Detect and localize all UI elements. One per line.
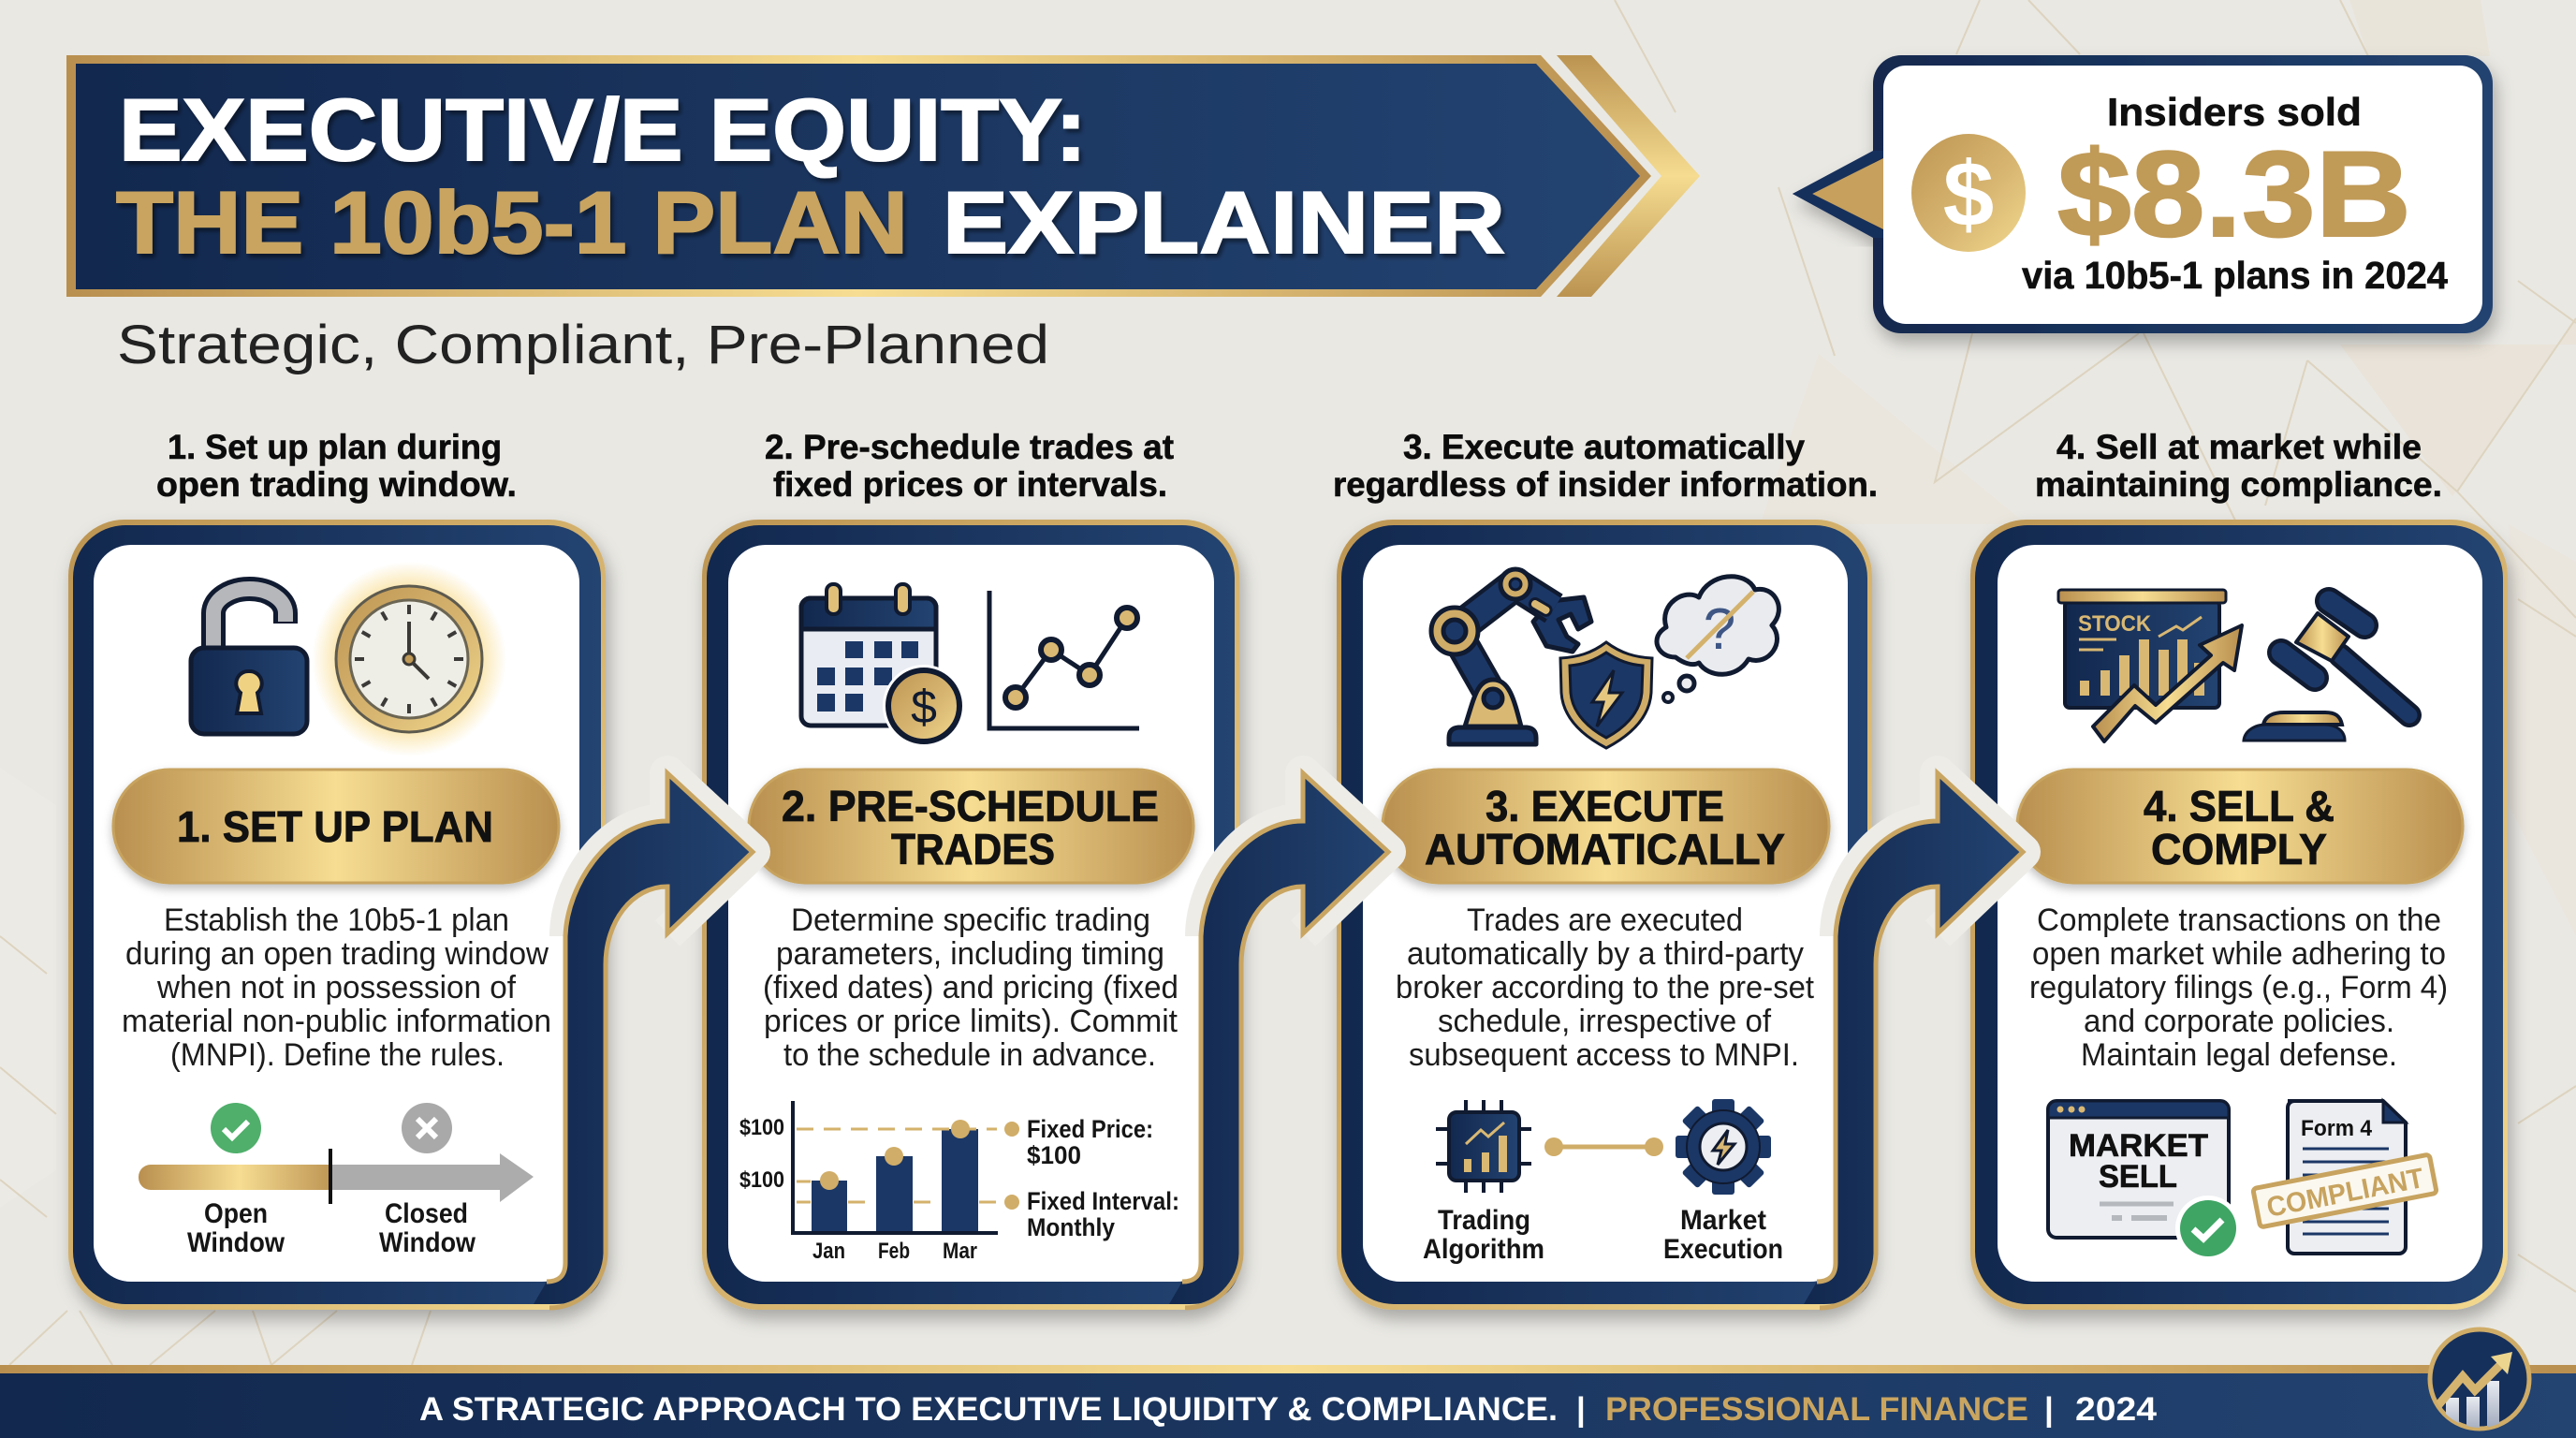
- body text 1: material non-public information: [122, 1004, 551, 1039]
- title banner: [66, 55, 1700, 297]
- label: market execution: [1663, 1205, 1783, 1265]
- icon: stock board: STOCK: [2078, 611, 2152, 637]
- icon: dollar coin: $: [1943, 142, 1994, 245]
- body text 3: broker according to the pre-set: [1396, 970, 1815, 1005]
- icon: robot arm: [1431, 569, 1591, 744]
- icon: logo badge: [2430, 1329, 2529, 1435]
- icon: line chart: [989, 591, 1139, 728]
- label: closed window: Closed: [385, 1198, 468, 1229]
- step caption 3: [1333, 428, 1878, 504]
- pill 2 title: [782, 782, 1159, 873]
- icon: calendar with coin: $: [911, 681, 937, 733]
- stamp: compliant: COMPLIANT: [2264, 1163, 2426, 1224]
- body text 2: to the schedule in advance.: [783, 1037, 1156, 1073]
- label: market execution: Market: [1680, 1205, 1766, 1236]
- body text 1: (MNPI). Define the rules.: [170, 1037, 505, 1073]
- panel 3 frame: [1337, 520, 1872, 1310]
- step caption 2: [765, 428, 1174, 504]
- pill 3 title: [1425, 782, 1785, 873]
- icon: stock board: [2058, 590, 2242, 741]
- body text 1: during an open trading window: [125, 936, 549, 972]
- icon: open padlock: [191, 589, 307, 734]
- pill 4 title: 4. SELL &: [2144, 782, 2334, 830]
- footer text gold: PROFESSIONAL FINANCE: [1605, 1391, 2028, 1428]
- body text 1: when not in possession of: [156, 970, 517, 1005]
- market sell window: SELL: [2099, 1159, 2177, 1195]
- label: closed window: [379, 1198, 476, 1258]
- connector line: [1544, 1137, 1663, 1156]
- body text 4: regulatory filings (e.g., Form 4): [2029, 970, 2448, 1005]
- chart y labels: $100: [739, 1167, 784, 1193]
- form 4 document with stamp: [2253, 1101, 2437, 1254]
- step caption 1: [156, 428, 517, 504]
- market sell window: [2048, 1101, 2241, 1261]
- label: market execution: Execution: [1663, 1234, 1783, 1265]
- callout text top: Insiders sold: [2107, 90, 2362, 134]
- icon: thought cloud: ?: [1704, 597, 1735, 662]
- chart y labels: [739, 1115, 784, 1193]
- icon: check badge: [2175, 1196, 2241, 1261]
- step caption 2: 2. Pre-schedule trades at: [765, 428, 1174, 466]
- chart y labels: $100: [739, 1115, 784, 1140]
- body text 2: (fixed dates) and pricing (fixed: [763, 970, 1178, 1005]
- icon: calendar with coin: [801, 584, 965, 747]
- body text 2: parameters, including timing: [776, 936, 1164, 972]
- icon: trading algorithm chip: [1436, 1100, 1531, 1193]
- pill 4 title: COMPLY: [2151, 825, 2327, 873]
- body text 4: [2029, 902, 2448, 1073]
- label: open window: Open: [204, 1198, 268, 1229]
- title line 2 gold: THE 10b5-1 PLAN: [116, 173, 908, 271]
- body text 3: Trades are executed: [1467, 902, 1743, 938]
- icon: green check: [211, 1103, 261, 1153]
- panel 1 frame: [68, 520, 606, 1310]
- chart month labels: Mar: [943, 1239, 977, 1264]
- pill 4 title: [2144, 782, 2334, 873]
- pill 3 title: 3. EXECUTE: [1486, 782, 1724, 830]
- chart legend: [1027, 1115, 1179, 1241]
- subtitle: Strategic, Compliant, Pre-Planned: [117, 315, 1049, 375]
- body text 1: Establish the 10b5-1 plan: [164, 902, 509, 938]
- chart legend: Monthly: [1027, 1213, 1115, 1241]
- step caption 4: 4. Sell at market while: [2056, 428, 2422, 466]
- footer text main: A STRATEGIC APPROACH TO EXECUTIVE LIQUIDITY & COMPLIANCE.: [419, 1391, 1558, 1428]
- chart legend: Fixed Interval:: [1027, 1187, 1179, 1215]
- icon: grey x: [402, 1103, 452, 1153]
- body text 3: [1396, 902, 1815, 1073]
- callout text bottom: via 10b5-1 plans in 2024: [2022, 254, 2448, 297]
- pill 3: [1383, 770, 1829, 883]
- label: trading algorithm: Trading: [1438, 1205, 1530, 1236]
- body text 2: [763, 902, 1178, 1073]
- footer divider: |: [2044, 1391, 2054, 1428]
- panel 2 frame: [702, 520, 1239, 1310]
- footer year: 2024: [2075, 1391, 2158, 1428]
- step caption 2: fixed prices or intervals.: [773, 465, 1167, 504]
- pill 2: [749, 770, 1193, 883]
- pill 2 title: 2. PRE-SCHEDULE: [782, 782, 1159, 830]
- icon: gavel: [2244, 601, 2409, 741]
- label: trading algorithm: Algorithm: [1423, 1234, 1544, 1265]
- form 4 document with stamp: Form 4: [2301, 1116, 2373, 1141]
- body text 2: prices or price limits). Commit: [764, 1004, 1178, 1039]
- icon: dollar coin: [1911, 134, 2026, 252]
- body text 3: subsequent access to MNPI.: [1409, 1037, 1799, 1073]
- chart month labels: Jan: [812, 1239, 845, 1264]
- pill 2 title: TRADES: [891, 825, 1055, 873]
- pill 1 title: 1. SET UP PLAN: [177, 802, 493, 851]
- open/closed window timeline: [139, 1103, 534, 1258]
- bar chart: fixed price and interval: [739, 1101, 1179, 1264]
- icon: shield with bolt: [1560, 642, 1652, 748]
- body text 4: open market while adhering to: [2032, 936, 2446, 972]
- step caption 1: 1. Set up plan during: [168, 428, 502, 466]
- label: open window: [187, 1198, 285, 1258]
- body text 3: automatically by a third-party: [1407, 936, 1804, 972]
- title line 2 white: EXPLAINER: [943, 173, 1505, 271]
- title line 1: EXECUTIV/E EQUITY:: [119, 81, 1087, 179]
- body text 4: Complete transactions on the: [2037, 902, 2441, 938]
- body text 1: [122, 902, 551, 1073]
- body text 2: Determine specific trading: [791, 902, 1150, 938]
- body text 4: Maintain legal defense.: [2081, 1037, 2397, 1073]
- footer bar: [0, 1365, 2576, 1438]
- pill 1: [113, 770, 559, 883]
- chart legend: $100: [1027, 1141, 1081, 1169]
- label: trading algorithm: [1423, 1205, 1544, 1265]
- panel 4 frame: [1970, 520, 2508, 1310]
- callout: insiders sold stat: [1793, 55, 2493, 333]
- label: closed window: Window: [379, 1227, 476, 1258]
- pill 4: [2017, 770, 2463, 883]
- step caption 3: 3. Execute automatically: [1403, 428, 1805, 466]
- step caption 1: open trading window.: [156, 465, 517, 504]
- arrow 2 to 3: [1169, 773, 1388, 1308]
- chart month labels: Feb: [878, 1239, 910, 1264]
- footer divider: |: [1576, 1391, 1586, 1428]
- callout figure: $8.3B: [2057, 125, 2411, 262]
- icon: market execution gear: [1676, 1099, 1771, 1195]
- step caption 4: [2035, 428, 2442, 504]
- arrow 1 to 2: [534, 773, 753, 1308]
- arrow 3 to 4: [1804, 773, 2023, 1308]
- step caption 4: maintaining compliance.: [2035, 465, 2442, 504]
- step caption 3: regardless of insider information.: [1333, 465, 1878, 504]
- icon: thought cloud: [1657, 577, 1778, 702]
- body text 3: schedule, irrespective of: [1438, 1004, 1772, 1039]
- body text 4: and corporate policies.: [2084, 1004, 2394, 1039]
- pill 3 title: AUTOMATICALLY: [1425, 825, 1785, 873]
- market sell window: MARKET: [2069, 1128, 2208, 1164]
- icon: clock with glow: [312, 562, 506, 756]
- chart month labels: [812, 1239, 977, 1264]
- label: open window: Window: [187, 1227, 285, 1258]
- chart legend: Fixed Price:: [1027, 1115, 1153, 1143]
